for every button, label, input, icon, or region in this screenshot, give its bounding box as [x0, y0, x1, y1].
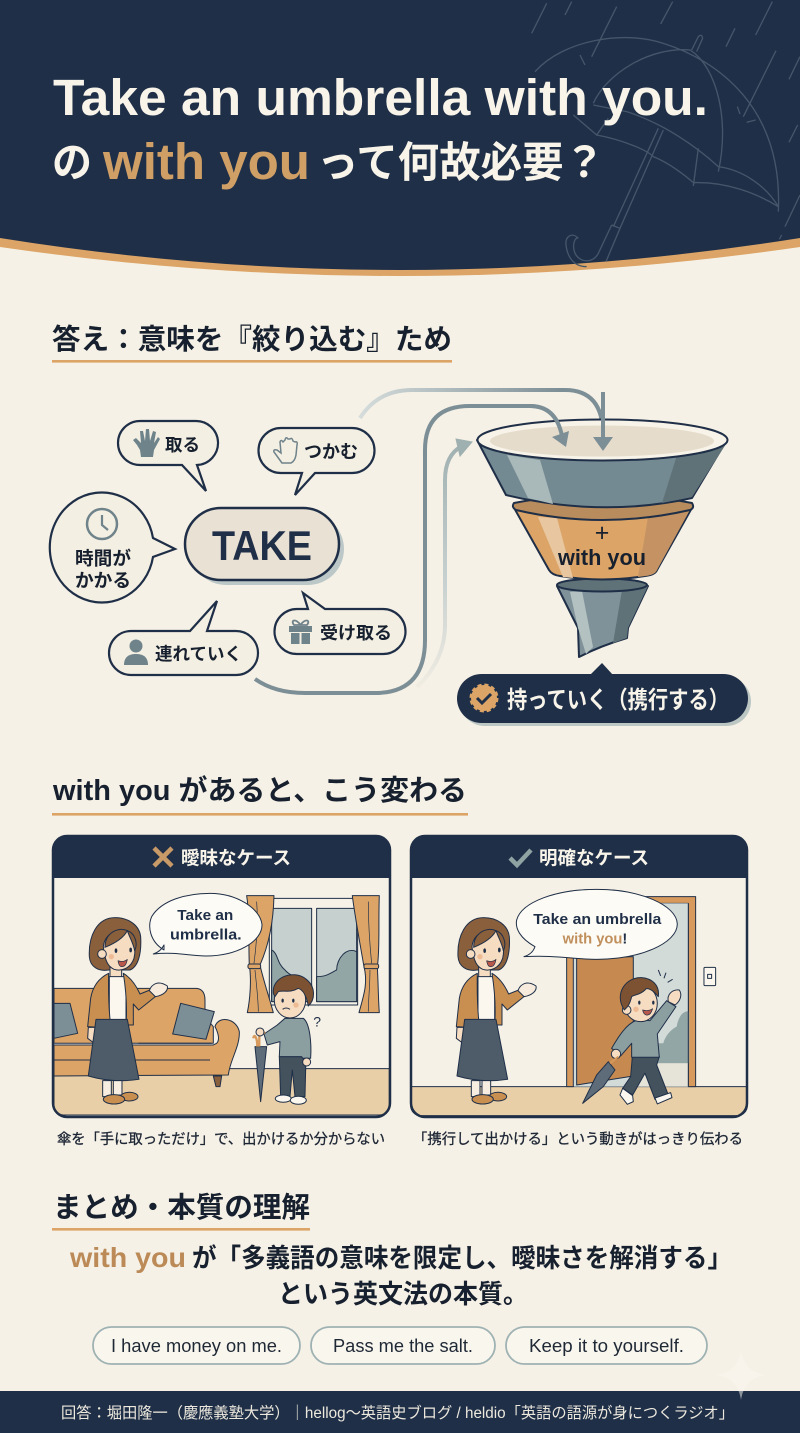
summary statement: with you: [69, 1242, 186, 1273]
pill: I have money on me.: I have money on me.: [111, 1336, 282, 1356]
speech bubble: Take an: [177, 907, 233, 924]
panel header: 曖昧なケース: [181, 848, 291, 868]
TAKE word bubbles: [50, 421, 406, 675]
heading: changes: with you があると、こう変わる: [52, 774, 467, 807]
window: [269, 898, 358, 1005]
figure: child with umbrella: [253, 975, 321, 1104]
icon: check badge: [471, 685, 497, 711]
summary statement: [69, 1242, 732, 1309]
curtains: [247, 896, 379, 1013]
speech bubble: [516, 889, 677, 959]
funnel: [477, 420, 728, 657]
header band: [0, 0, 800, 276]
bubble: つかむ: つかむ: [304, 442, 358, 462]
bubble: 取る: 取る: [165, 435, 200, 455]
pill: Keep it to yourself.: Keep it to yourself.: [529, 1336, 684, 1356]
bubble: 取る: [118, 421, 218, 491]
bubble: 連れていく: [109, 601, 258, 675]
example phrase pills: [93, 1327, 707, 1364]
figure: mother: [88, 918, 168, 1104]
pill: Keep it to yourself.: [506, 1327, 707, 1364]
figure: mother: [456, 918, 536, 1104]
panel header: 明確なケース: [539, 848, 649, 868]
arrows into funnel: [255, 390, 603, 693]
figure: child with umbrella: ?: [313, 1014, 321, 1030]
bubble: 連れていく: 連れていく: [155, 644, 242, 664]
heading: answer: 答え：意味を『絞り込む』ため: [52, 324, 452, 356]
bubble: 受け取る: 受け取る: [320, 623, 392, 643]
scene: living room: [54, 893, 389, 1115]
caption: ambiguous: 傘を「手に取っただけ」で、出かけるか分からない: [57, 1131, 385, 1148]
speech bubble: umbrella.: [170, 926, 242, 943]
bubble: 受け取る: [275, 593, 406, 654]
speech bubble: Take an umbrella: [533, 912, 662, 928]
TAKE pill: [185, 508, 344, 585]
title: の: [52, 139, 92, 186]
panel header: [53, 836, 390, 878]
title: with you: [102, 133, 310, 190]
result pill: [457, 663, 751, 726]
sofa: [54, 988, 239, 1087]
speech bubble: with you!: [562, 931, 627, 947]
bubble: つかむ: [258, 428, 374, 495]
title: って何故必要？: [317, 139, 605, 186]
pill: I have money on me.: [93, 1327, 300, 1364]
bubble: 時間がかかる: かかる: [75, 570, 131, 591]
footer: 回答：堀田隆一（慶應義塾大学）｜hellog～英語史ブログ / heldio「英語の語源が身につくラジオ」: [61, 1403, 734, 1422]
caption: clear: 「携行して出かける」という動きがはっきり伝わる: [413, 1131, 743, 1148]
figure: child with umbrella: [583, 978, 681, 1104]
cushions: [54, 1003, 78, 1038]
bubble: 時間がかかる: [50, 492, 175, 602]
decorative sparkle: [716, 1350, 766, 1400]
funnel lower spout: [557, 578, 648, 657]
footer: [0, 1391, 800, 1433]
title: [52, 69, 708, 190]
funnel gold band: with you: [557, 545, 646, 570]
pill: Pass me the salt.: Pass me the salt.: [333, 1336, 473, 1356]
title: Take an umbrella with you.: [53, 69, 708, 126]
panel: clear case: [411, 836, 747, 1117]
panel: ambiguous case: [53, 836, 390, 1117]
summary statement: が「多義語の意味を限定し、曖昧さを解消する」: [192, 1243, 732, 1273]
funnel gold band: +: [595, 519, 609, 547]
pill: Pass me the salt.: [311, 1327, 495, 1364]
funnel gold band: [513, 494, 693, 580]
heading: summary: まとめ・本質の理解: [53, 1192, 310, 1224]
TAKE pill: TAKE: [212, 522, 312, 569]
speech bubble: [150, 893, 262, 956]
door and outside: [567, 897, 716, 1087]
bubble: 時間がかかる: 時間が: [75, 548, 131, 569]
scene: doorway: [411, 889, 747, 1116]
funnel top cone: [477, 420, 728, 507]
summary statement: という英文法の本質。: [278, 1279, 528, 1309]
arrow tips over funnel: [530, 392, 613, 451]
panel header: [411, 836, 747, 878]
result pill: 持っていく（携行する）: [507, 687, 729, 714]
icon: umbrella and rain line art: [532, 2, 800, 267]
